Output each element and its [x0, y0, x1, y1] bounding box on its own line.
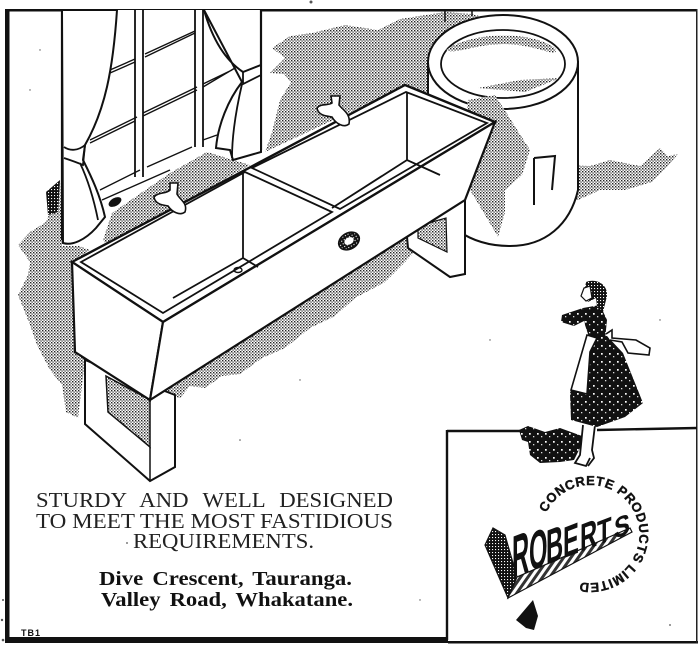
left basin: [81, 172, 332, 313]
logo brand name: R: [580, 510, 597, 560]
addresses: [99, 568, 353, 611]
slogan text: TO MEET THE MOST FASTIDIOUS: [36, 509, 393, 533]
logo block left end: [485, 528, 517, 598]
apron bow: [606, 330, 650, 355]
arm: [561, 308, 586, 326]
curtain left tie and fold: [64, 145, 98, 220]
logo brand name: S: [614, 506, 630, 545]
logo block base: [508, 528, 632, 598]
skirt: [570, 336, 643, 427]
small anchor mark: [516, 600, 538, 630]
logo brand name: [512, 506, 630, 591]
water tank: [428, 10, 578, 246]
window: [62, 10, 261, 246]
logo brand name: T: [597, 510, 612, 553]
curtain left: [62, 10, 117, 244]
addresses: Dive Crescent, Tauranga.: [99, 568, 352, 590]
curtain right tie and fold: [232, 72, 261, 158]
right basin: [252, 92, 487, 209]
halftone shadow: floor left of sink: [18, 180, 90, 418]
slogan text: REQUIREMENTS.: [133, 529, 314, 553]
maker's badge: [335, 229, 363, 253]
bodice: [583, 305, 607, 340]
code mark: TB1: [21, 628, 40, 638]
logo panel outline: [447, 428, 697, 640]
halftone shadow: floor under sink: [160, 215, 425, 398]
halftone shadow: wall behind sink: [265, 12, 515, 152]
logo brand name: E: [563, 512, 579, 568]
left leg of sink: [85, 360, 175, 481]
right tap: [317, 96, 349, 126]
logo brand name: R: [512, 518, 529, 591]
logo brand name: O: [529, 517, 548, 584]
drain hole: [234, 268, 242, 272]
addresses: Valley Road, Whakatane.: [101, 589, 353, 611]
right leg of sink: [405, 200, 465, 277]
halftone shadow: floor right of tank: [555, 148, 678, 205]
floor cloth bundle: [519, 426, 582, 463]
hair and head: [584, 281, 607, 312]
concrete double sink: [72, 85, 495, 400]
curtain right: [204, 10, 261, 160]
slogan text: STURDY AND WELL DESIGNED: [36, 488, 393, 512]
logo brand name: B: [546, 514, 563, 576]
apron: [571, 335, 597, 394]
left tap: [154, 183, 186, 214]
legs and shoes: [575, 425, 595, 466]
logo circular text: CONCRETE PRODUCTS LIMITED: [540, 476, 649, 592]
slogan text: [36, 488, 393, 553]
woman figure: [561, 281, 650, 466]
